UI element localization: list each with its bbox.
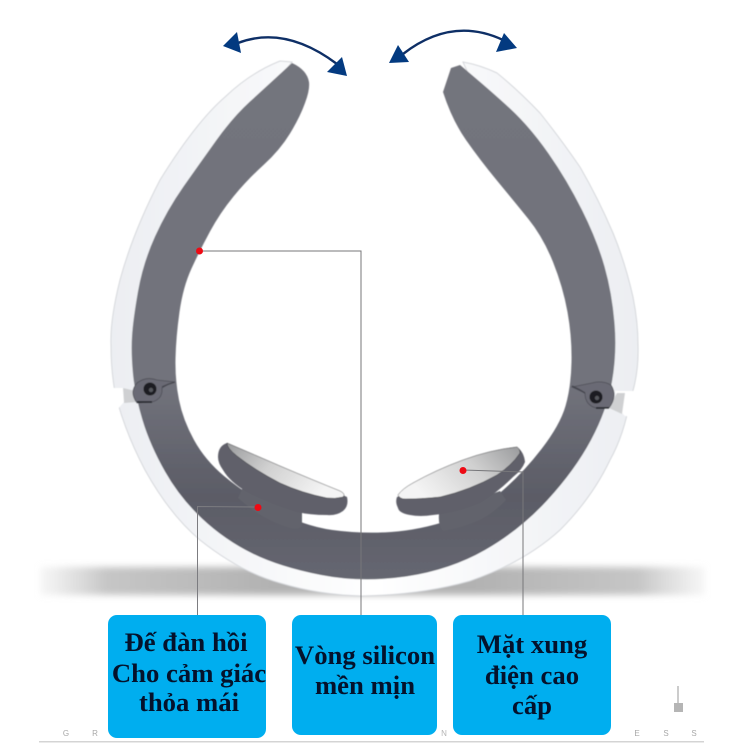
footer baseline and spaced letters: G xyxy=(63,729,69,738)
left double arrow xyxy=(223,32,347,76)
footer baseline and spaced letters: R xyxy=(92,729,98,738)
leader line: silicone ring xyxy=(196,248,361,616)
callout: elastic base: Cho cảm giác xyxy=(112,658,266,688)
gray silicone band xyxy=(132,63,615,579)
right hinge connector xyxy=(609,393,625,414)
callout: pulse surface xyxy=(453,615,611,735)
footer baseline and spaced letters: S xyxy=(663,729,669,738)
right electrode pad xyxy=(396,447,525,531)
right double arrow xyxy=(389,31,517,63)
callout: elastic base xyxy=(108,615,266,738)
footer baseline and spaced letters: E xyxy=(634,729,640,738)
callout: silicone ring: Vòng silicon xyxy=(295,640,435,670)
left hinge screw xyxy=(133,379,175,403)
callout: pulse surface: điện cao xyxy=(485,660,579,690)
left hinge connector xyxy=(123,388,139,403)
callout: pulse surface: Mặt xung xyxy=(477,629,588,659)
right pad base xyxy=(396,447,525,516)
right hinge screw xyxy=(572,382,614,408)
neck massager product xyxy=(106,61,645,596)
callout: elastic base: Đế đàn hồi xyxy=(124,627,248,657)
leader line: pulse surface xyxy=(460,467,523,616)
footer baseline and spaced letters xyxy=(39,729,704,742)
left pad metal face xyxy=(227,443,344,498)
left hinge gap xyxy=(106,388,124,414)
footer baseline and spaced letters: S xyxy=(691,729,697,738)
leader line: elastic base xyxy=(198,504,262,616)
white outer shell xyxy=(111,61,638,596)
left pad base xyxy=(218,443,348,515)
right hinge gap xyxy=(615,391,645,418)
small gray scroll marker xyxy=(674,686,683,712)
callout: pulse surface: cấp xyxy=(512,690,552,720)
floor shadow xyxy=(40,567,705,595)
left pad stem xyxy=(238,487,302,529)
right pad stem xyxy=(439,491,506,531)
right pad metal face xyxy=(398,447,520,499)
footer letters beside callouts: N xyxy=(441,729,447,738)
callout: silicone ring xyxy=(292,615,437,735)
callout: elastic base: thỏa mái xyxy=(139,687,240,717)
left electrode pad xyxy=(218,443,348,529)
callout: silicone ring: mền mịn xyxy=(315,670,415,700)
